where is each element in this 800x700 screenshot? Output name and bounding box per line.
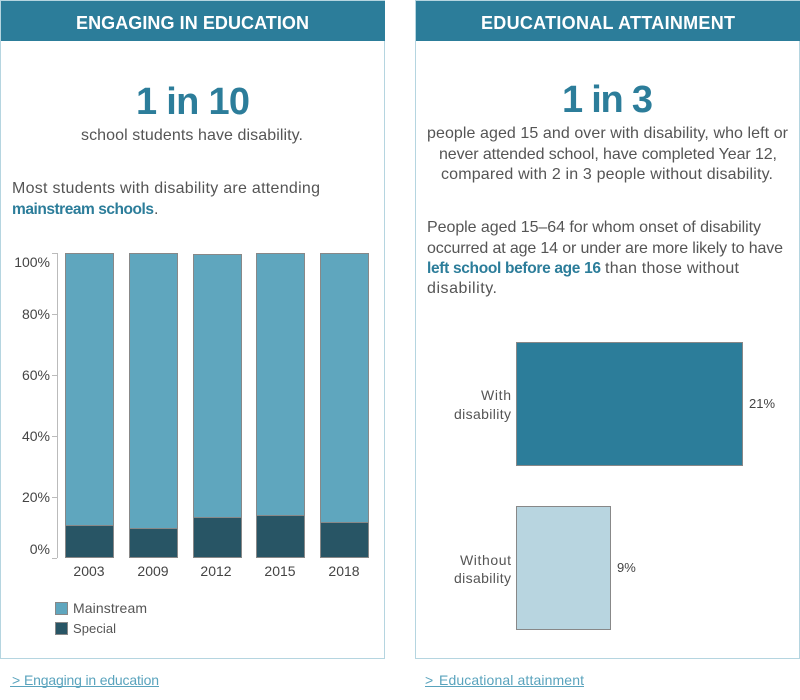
text: left school before age 16 [427, 219, 783, 297]
text: mainstream schools: mainstream schools [12, 201, 154, 218]
panel: engaging in education [0, 0, 385, 658]
text: year 12 [427, 125, 789, 183]
header: engaging in education [1, 1, 385, 41]
x axis labels: 2003 [73, 563, 105, 579]
statistic: 1 in 3: 1 in 3 [562, 79, 653, 121]
bar: with disability: With [481, 387, 511, 403]
bar: with disability [454, 342, 775, 466]
y axis: 80% [22, 306, 50, 322]
x axis labels: 2009 [137, 563, 169, 579]
legend: Special [73, 621, 116, 636]
text: mainstream schools: Most students with disability are attending [12, 180, 320, 197]
bar chart: left school before 16 [454, 342, 775, 630]
bar 2015 [256, 254, 304, 558]
bar 2018 [320, 254, 368, 558]
header: educational attainment [416, 1, 800, 41]
text: left school before age 16: People aged 15–64 for whom onset of disability [427, 219, 761, 236]
text: school students: school students have disability. [81, 127, 303, 144]
panel: educational attainment [416, 0, 800, 658]
bar: without disability [454, 506, 636, 630]
link: educational attainment: Educational attainment [439, 672, 584, 688]
y axis: 60% [22, 367, 50, 383]
legend: Mainstream [73, 600, 147, 616]
statistic: 1 in 10: 1 in 10 [136, 81, 250, 123]
legend [56, 600, 147, 636]
y axis [14, 253, 58, 558]
stacked bar chart [14, 253, 368, 579]
text: year 12: people aged 15 and over with disability, who left or [427, 125, 789, 142]
text: year 12: never attended school, have completed Year 12, [439, 146, 777, 163]
y axis: 0% [30, 541, 50, 557]
text: left school before age 16: occurred at age 14 or under are more likely to have [427, 240, 783, 257]
text: left school before age 16: disability. [427, 280, 497, 297]
link: engaging in education: > [12, 672, 20, 688]
text: left school before age 16: left school before age 16 [427, 260, 601, 277]
bar 2009 [130, 254, 178, 558]
bar: with disability: disability [454, 406, 511, 422]
x axis labels [73, 563, 360, 579]
x axis labels: 2012 [200, 563, 232, 579]
link: engaging in education: Engaging in education [24, 672, 159, 688]
bar 2012 [194, 254, 242, 558]
link: educational attainment: > [425, 672, 433, 688]
bar: with disability: 21% [749, 396, 775, 411]
header: engaging in education: ENGAGING IN EDUCATION [76, 13, 309, 33]
bar: without disability: Without [460, 552, 511, 568]
bar: without disability: disability [454, 570, 511, 586]
bar 2003 [66, 254, 114, 558]
y axis: 100% [14, 254, 50, 270]
x axis labels: 2015 [264, 563, 296, 579]
text: mainstream schools: . [154, 201, 158, 218]
text: left school before age 16: than those without [605, 260, 740, 277]
header: educational attainment: EDUCATIONAL ATTAINMENT [481, 13, 735, 33]
text: year 12: compared with 2 in 3 people without disability. [441, 166, 773, 183]
bar: without disability: 9% [617, 560, 636, 575]
y axis: 40% [22, 428, 50, 444]
text: mainstream schools [12, 180, 320, 218]
y axis: 20% [22, 489, 50, 505]
x axis labels: 2018 [328, 563, 360, 579]
